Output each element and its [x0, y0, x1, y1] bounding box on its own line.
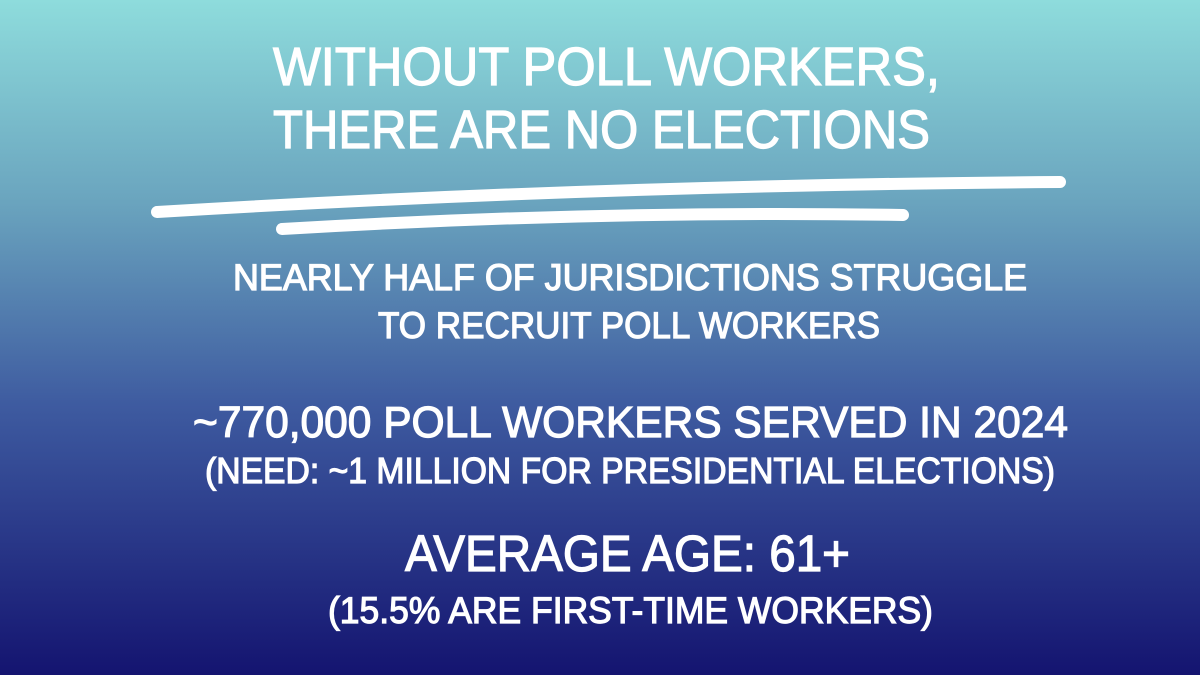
stat: average age: AVERAGE AGE: 61+	[405, 525, 850, 582]
title	[273, 37, 940, 160]
title: WITHOUT POLL WORKERS,	[273, 37, 940, 97]
subheading: jurisdictions struggle	[233, 257, 1027, 346]
stat: average age: (15.5% ARE FIRST-TIME WORKERS)	[328, 590, 933, 631]
subheading: jurisdictions struggle: TO RECRUIT POLL WORKERS	[378, 305, 880, 346]
subheading: jurisdictions struggle: NEARLY HALF OF JURISDICTIONS STRUGGLE	[233, 257, 1027, 298]
stat: poll workers served	[193, 398, 1068, 491]
title: THERE ARE NO ELECTIONS	[273, 100, 930, 160]
stat: average age	[328, 525, 933, 631]
stat: poll workers served: ~770,000 POLL WORKERS SERVED IN 2024	[193, 398, 1068, 447]
underline swooshes	[157, 182, 1060, 229]
stat: poll workers served: (NEED: ~1 MILLION FOR PRESIDENTIAL ELECTIONS)	[205, 450, 1055, 491]
